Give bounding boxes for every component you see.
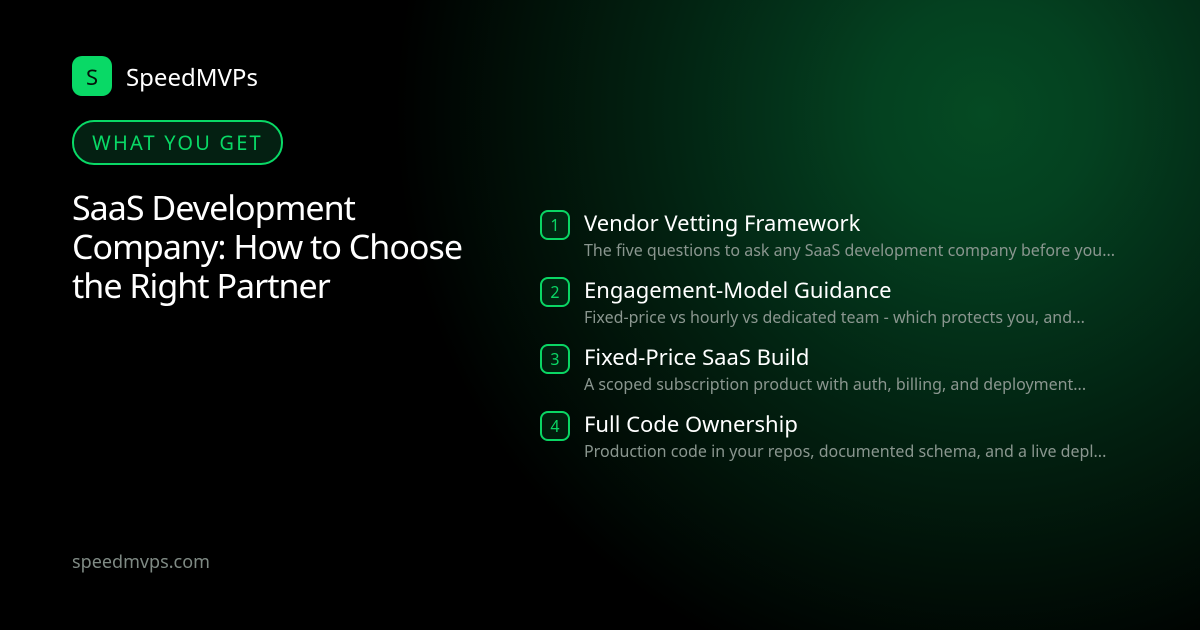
item 2 number [540, 277, 570, 307]
item 1 description: The five questions to ask any SaaS development company before you... [584, 239, 1115, 261]
item 3 heading: Fixed-Price SaaS Build [584, 342, 809, 372]
item 4 heading: Full Code Ownership [584, 409, 798, 439]
item 2 description: Fixed-price vs hourly vs dedicated team - which protects you, and... [584, 306, 1085, 328]
item 4 number [540, 411, 570, 441]
badge: what you get: WHAT YOU GET [92, 129, 263, 156]
item 3 number [540, 344, 570, 374]
item 4 description: Production code in your repos, documented schema, and a live depl... [584, 440, 1106, 462]
logo mark: S [86, 62, 98, 92]
brand name: SpeedMVPs [126, 61, 258, 94]
item 3 number: 3 [550, 348, 560, 370]
title: SaaS Development [72, 184, 355, 230]
item 3 description: A scoped subscription product with auth, billing, and deployment... [584, 373, 1086, 395]
logo mark [72, 56, 112, 96]
item 1 number [540, 210, 570, 240]
title: Company: How to Choose [72, 223, 462, 269]
title [72, 184, 462, 308]
item 1 number: 1 [550, 214, 560, 236]
badge: what you get [72, 120, 283, 165]
item 2 number: 2 [550, 281, 560, 303]
item 1 heading: Vendor Vetting Framework [584, 208, 860, 238]
item 4 number: 4 [550, 415, 560, 437]
footer url: speedmvps.com [72, 550, 210, 574]
item 2 heading: Engagement-Model Guidance [584, 275, 892, 305]
title: the Right Partner [72, 262, 330, 308]
